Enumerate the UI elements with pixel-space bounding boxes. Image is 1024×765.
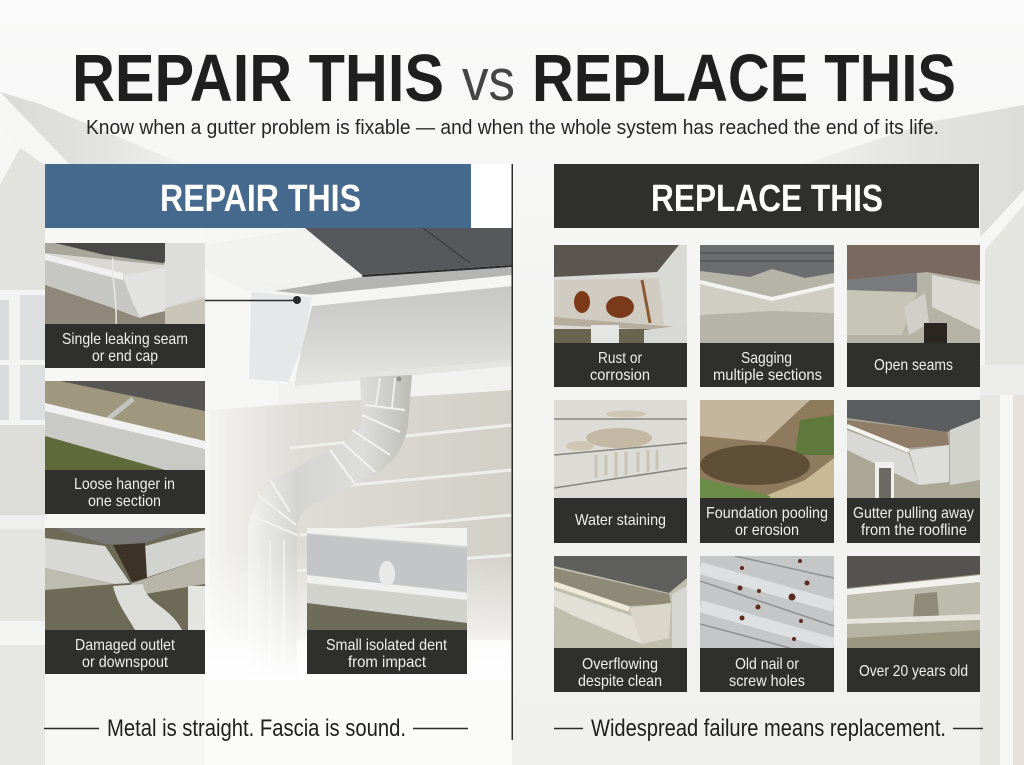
card: open seams: Open seams	[874, 357, 953, 374]
card: water staining	[554, 400, 687, 543]
card: small dent	[307, 528, 467, 674]
main photo: siding below the eave	[210, 390, 512, 640]
card: overflowing: Overflowing	[582, 656, 658, 673]
panel header: replace this	[554, 164, 979, 228]
card: over 20 years old: Over 20 years old	[859, 663, 968, 680]
panel header: replace this: REPLACE THIS	[651, 178, 883, 220]
right roof	[800, 105, 1024, 245]
card: loose hanger: Loose hanger in	[74, 476, 175, 493]
main photo: downspout	[248, 375, 412, 690]
card: rust or corrosion: corrosion	[590, 367, 650, 384]
footer note: repair: Metal is straight. Fascia is sound.	[107, 715, 406, 742]
main photo: gutter	[248, 275, 512, 405]
footer note: replace: Widespread failure means replacement.	[591, 715, 946, 742]
card: old nail holes	[700, 556, 834, 692]
subtitle: Know when a gutter problem is fixable — and when the whole system has reached the end of its life.	[86, 117, 939, 139]
card: overflowing: despite clean	[578, 673, 662, 690]
card: small dent: Small isolated dent	[326, 637, 447, 654]
card: sagging	[700, 245, 834, 387]
card: rust or corrosion: Rust or	[598, 350, 643, 367]
title	[72, 41, 956, 116]
center divider	[512, 164, 513, 740]
card: single leaking seam: Single leaking seam	[62, 331, 188, 348]
card: gutter pulling away	[847, 400, 980, 543]
card: water staining: Water staining	[575, 512, 666, 529]
title: vs	[462, 48, 515, 113]
title: REPAIR THIS	[72, 41, 444, 116]
card: rust or corrosion	[554, 245, 687, 387]
card: single leaking seam	[45, 243, 205, 368]
title: REPLACE THIS	[532, 41, 956, 116]
card: old nail holes: Old nail or	[735, 656, 800, 673]
card: over 20 years old	[847, 556, 980, 692]
card: damaged outlet: or downspout	[82, 654, 168, 671]
card: foundation pooling: Foundation pooling	[706, 505, 828, 522]
callout line to end cap	[205, 296, 301, 304]
card: damaged outlet	[45, 528, 205, 674]
card: gutter pulling away: from the roofline	[861, 522, 967, 539]
card: damaged outlet: Damaged outlet	[75, 637, 175, 654]
card: loose hanger: one section	[88, 493, 161, 510]
card: sagging: Sagging	[741, 350, 792, 367]
card: old nail holes: screw holes	[729, 673, 805, 690]
card: foundation pooling	[700, 400, 834, 543]
card: loose hanger	[45, 381, 205, 514]
card: foundation pooling: or erosion	[735, 522, 799, 539]
card: sagging: multiple sections	[713, 367, 822, 384]
card: overflowing	[554, 556, 687, 692]
card: single leaking seam: or end cap	[92, 348, 158, 365]
card: small dent: from impact	[348, 654, 427, 671]
main photo: roof shingles	[262, 228, 512, 295]
left roof	[0, 92, 185, 165]
panel: repair background scene	[45, 164, 512, 765]
card: gutter pulling away: Gutter pulling away	[853, 505, 974, 522]
card: open seams	[847, 245, 980, 387]
panel header: repair this: REPAIR THIS	[160, 178, 361, 220]
panel header: repair this	[45, 164, 471, 228]
